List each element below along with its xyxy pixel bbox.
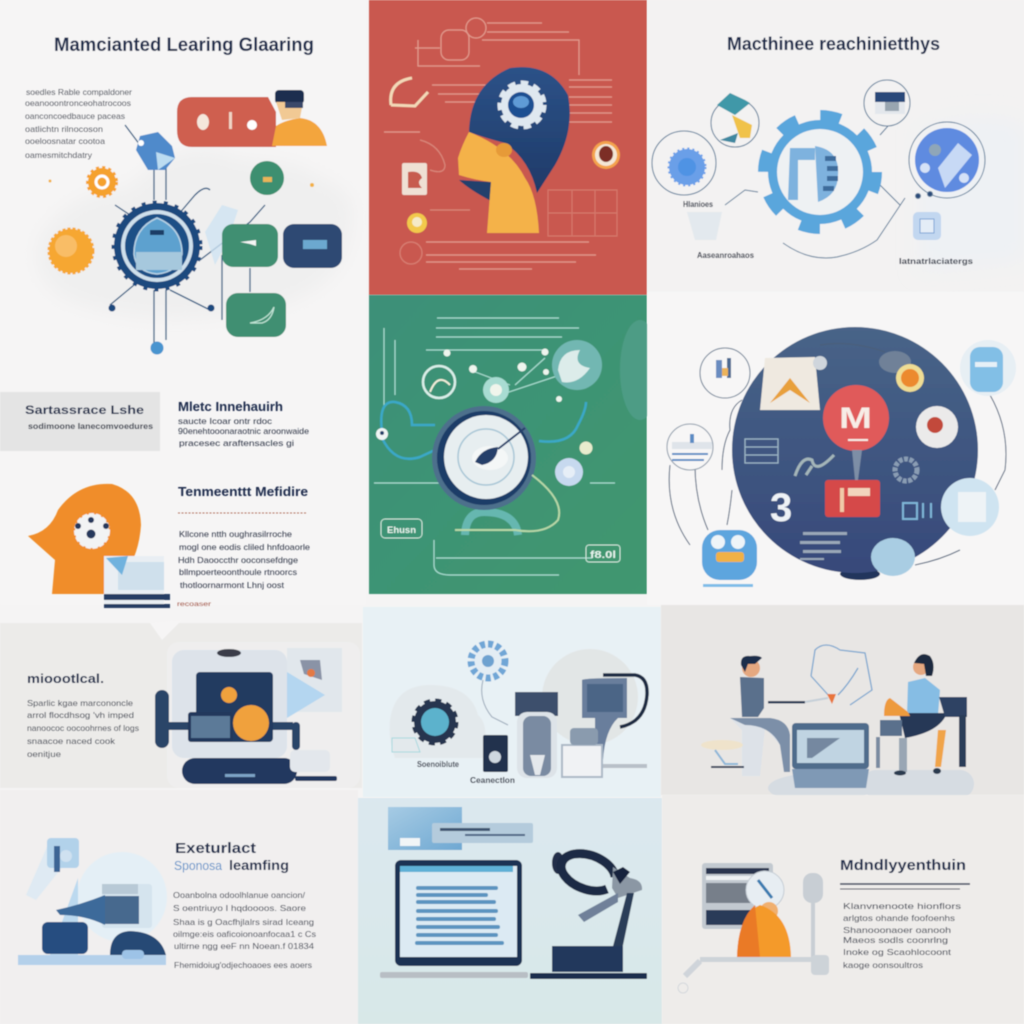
connector lines	[110, 125, 265, 345]
icon: green rounded tile arrow	[222, 224, 278, 267]
body text: thotloornarmont Lhnj oost	[180, 580, 285, 590]
body text: Kllcone ntth oughrasilrroche	[179, 529, 292, 539]
icon: red orb	[823, 385, 889, 451]
panel: section machine info	[0, 392, 310, 608]
intro text block: ooeloosnatar cootoa	[25, 136, 105, 146]
circuit traces	[374, 318, 615, 575]
icon: pale swirl sphere	[552, 340, 602, 390]
icon: blue machine illustration	[18, 838, 167, 965]
panel: monday section bottom right	[662, 795, 1024, 1024]
icon: seated woman	[876, 654, 967, 776]
heading: Macthinee reachinietthys	[727, 34, 940, 54]
panel: people at desk	[661, 605, 1024, 803]
icon: laptop on desk	[792, 723, 869, 788]
panel: top left machine learning diagram	[0, 0, 366, 605]
icon: small device	[483, 735, 508, 772]
body text: S oentriuyo I hqdoooos. Saore	[173, 903, 306, 913]
panel: red head illustration	[369, 0, 647, 295]
icon: glyph	[795, 455, 834, 476]
caption left: Soenoiblute	[417, 760, 460, 769]
body text: arlgtos ohande foofoenhs	[843, 913, 955, 923]
icon: navy rounded tile	[283, 224, 342, 268]
label: left tag	[381, 519, 422, 538]
label: right caption: Iatnatrlaciatergs	[899, 257, 974, 266]
body text: Fhemidoiug'odjechoaoes ees aoers	[174, 960, 312, 970]
heading and text	[178, 399, 309, 448]
wires: pale	[455, 475, 559, 531]
icon: blue robot	[702, 530, 757, 587]
panel: navy globe diagram	[647, 292, 1024, 605]
body text	[27, 698, 139, 759]
body text: mogl one eodis cliled hnfdoaorle	[179, 542, 310, 552]
label: right tag: f8.0l	[590, 550, 616, 561]
stem between orb and card	[852, 450, 862, 480]
body text	[173, 890, 316, 970]
icon: red orb: M	[839, 402, 872, 435]
icon: orange head with laptop	[28, 484, 170, 608]
icon: pale bubble	[941, 478, 999, 536]
icon: central clock dial	[432, 406, 536, 510]
icon: white circle with red dot	[916, 406, 958, 448]
intro text block: oanconcoedbauce paceas	[25, 111, 125, 121]
thin connectors	[652, 80, 985, 258]
body text: snaacoe naced cook	[27, 736, 116, 746]
connectors	[669, 344, 1006, 565]
body text: oenitjue	[27, 749, 61, 759]
icon: circle badge left lower	[667, 424, 713, 470]
intro text block: oatlichtn rilnocoson	[25, 124, 103, 134]
heading and text: saucte Icoar ontr rdoc	[178, 416, 273, 426]
icon: orange ring gear	[879, 351, 924, 392]
icon: text lines	[800, 532, 847, 560]
panel: mechanical row left	[0, 620, 362, 788]
body text: nanoococ oocoohrnes of logs	[27, 723, 139, 733]
panel: laptop and headset bottom middle	[358, 798, 662, 1024]
icon: seated man	[701, 656, 828, 776]
icon: orange sun	[49, 229, 93, 273]
heading: leamfing	[229, 857, 289, 873]
body text	[843, 901, 961, 970]
icon: small eye node	[592, 141, 620, 169]
icon: bubble	[555, 458, 583, 486]
label: small tag: Hlanioes	[683, 200, 713, 209]
body text: bllmpoerteoonthoule rtnoorcs	[179, 567, 297, 577]
heading	[174, 840, 289, 873]
icon: tall machine	[515, 692, 558, 778]
pale clouds	[768, 770, 974, 803]
icon: red card	[825, 480, 880, 517]
body text: Inoke og Scaohlocoont	[843, 947, 952, 957]
icon: cream swirl	[391, 78, 428, 106]
heading and text: Mletc Innehauirh	[178, 399, 283, 414]
heading: Mdndlyyenthuin	[840, 857, 966, 874]
icon: monitor with orange figure	[678, 863, 829, 993]
icon: central blue gear	[114, 203, 200, 289]
icon: dark gear	[414, 701, 456, 743]
icon: navy neck shadow	[459, 180, 491, 201]
icon: headset on stand	[530, 852, 647, 979]
icon: large blue gear	[765, 117, 875, 227]
icon: envelope card	[760, 356, 827, 410]
icon: recycle tile	[402, 163, 427, 195]
icon: blue orb	[915, 128, 979, 192]
icon: yellow node	[407, 213, 427, 233]
label: right tag	[586, 545, 620, 562]
panel: top right machine architecture	[647, 0, 1024, 292]
body text: recoaser	[177, 601, 212, 608]
body text: oilmge:eis oaficoionoanfocaa1 c Cs	[173, 929, 316, 939]
title: Mamcianted Learing Glaaring	[54, 35, 314, 56]
icon: pale doc	[687, 212, 722, 240]
callout: red speech panel with person	[177, 90, 327, 147]
icon: glowing node	[483, 377, 509, 403]
nodes	[48, 180, 314, 354]
icon: network wires	[811, 645, 872, 705]
body text: ultirne ngg eeF nn Noean.f 01834	[174, 941, 314, 951]
icon: large scanner	[562, 675, 647, 777]
icon: blue hexagon	[136, 132, 175, 170]
callout: grey label	[0, 392, 160, 451]
label: left caption: Aaseanroahaos	[697, 251, 755, 260]
icon: swirl ring	[423, 366, 455, 398]
body text: Sparlic kgae marcononcle	[27, 698, 133, 708]
body text: Shanooonaoer oanooh	[843, 925, 951, 935]
body text: Shaa is g Oacfhjlalrs sirad Iceang	[173, 917, 314, 927]
icon: pale flask	[392, 738, 420, 752]
icon: blue small gear	[669, 149, 705, 185]
intro text block: soedles Rable compaldoner	[26, 87, 132, 97]
icon: doc lines	[745, 439, 778, 463]
icon: yellow head profile	[458, 132, 539, 233]
body text: kaoge oonsoultros	[843, 960, 923, 970]
dotted rule	[178, 512, 307, 514]
icon: gear	[895, 459, 917, 481]
body text	[177, 529, 310, 608]
icon: green rounded tile leaf	[226, 293, 286, 337]
icon: blue capsule	[871, 538, 915, 576]
icon: blue gear	[471, 644, 508, 725]
navy circle	[732, 327, 978, 573]
icon: circle badge left upper	[700, 348, 750, 398]
nodes	[444, 348, 592, 454]
heading: Exeturlact	[175, 840, 256, 857]
icon: small eye node	[376, 428, 388, 440]
icon: green circle badge	[250, 161, 284, 195]
icon: navy hair with gear	[469, 67, 570, 193]
heading: Sponosa	[174, 858, 223, 873]
icon: monitor badge	[875, 92, 905, 114]
faint lattice	[548, 190, 617, 236]
body text: Klanvnenoote hionflors	[843, 901, 961, 911]
icon: teal stand	[465, 512, 518, 535]
heading: mioootlcal.	[27, 671, 104, 686]
icon: numeral glyph: 3	[770, 486, 792, 530]
backdrop circle	[542, 649, 638, 745]
icon: pale blue network shards	[205, 205, 238, 265]
icon: chip	[913, 212, 941, 240]
circuit traces	[384, 18, 612, 269]
icon: orange gear small	[88, 168, 116, 196]
rule	[840, 884, 970, 889]
icon: folder card	[388, 807, 533, 850]
heading and text: pracesec araftensacles gi	[179, 438, 294, 448]
icon: tag	[903, 503, 931, 519]
intro text block	[25, 87, 132, 160]
icon: laptop	[380, 860, 528, 978]
body text: arrol flocdhsog 'vh imped	[27, 710, 134, 720]
icon: bird and leaf	[717, 93, 752, 143]
intro text block: oeanooontronceohatrocoos	[25, 98, 131, 108]
callout: grey label: sodimoone Ianecomvoedures	[28, 422, 154, 431]
panel: gears row middle	[363, 607, 661, 797]
panel: green clock illustration	[369, 295, 660, 594]
heading and text: 90enehtooonaraotnic aroonwaide	[178, 426, 309, 436]
icon: blue tile	[960, 340, 1016, 396]
body text: Hdh Daooccthr ooconsefdnge	[178, 555, 298, 565]
wires	[381, 402, 586, 459]
body text: Ooanbolna odoolhlanue oancion/	[173, 890, 306, 900]
body text: Maeos sodls coonrlng	[843, 935, 948, 945]
heading: treatment: Tenmeenttt Mefidire	[178, 484, 308, 499]
intro text block: oamesmitchdatry	[25, 150, 93, 160]
callout: grey label: Sartassrace Lshe	[25, 403, 144, 417]
label: left tag: Ehusn	[387, 525, 416, 535]
caption right: Ceanectlon	[470, 776, 515, 785]
panel: experimental learning bottom left	[0, 790, 358, 1024]
icon: machine	[155, 642, 360, 788]
backdrop cloud	[390, 685, 486, 758]
navy base	[840, 568, 880, 580]
